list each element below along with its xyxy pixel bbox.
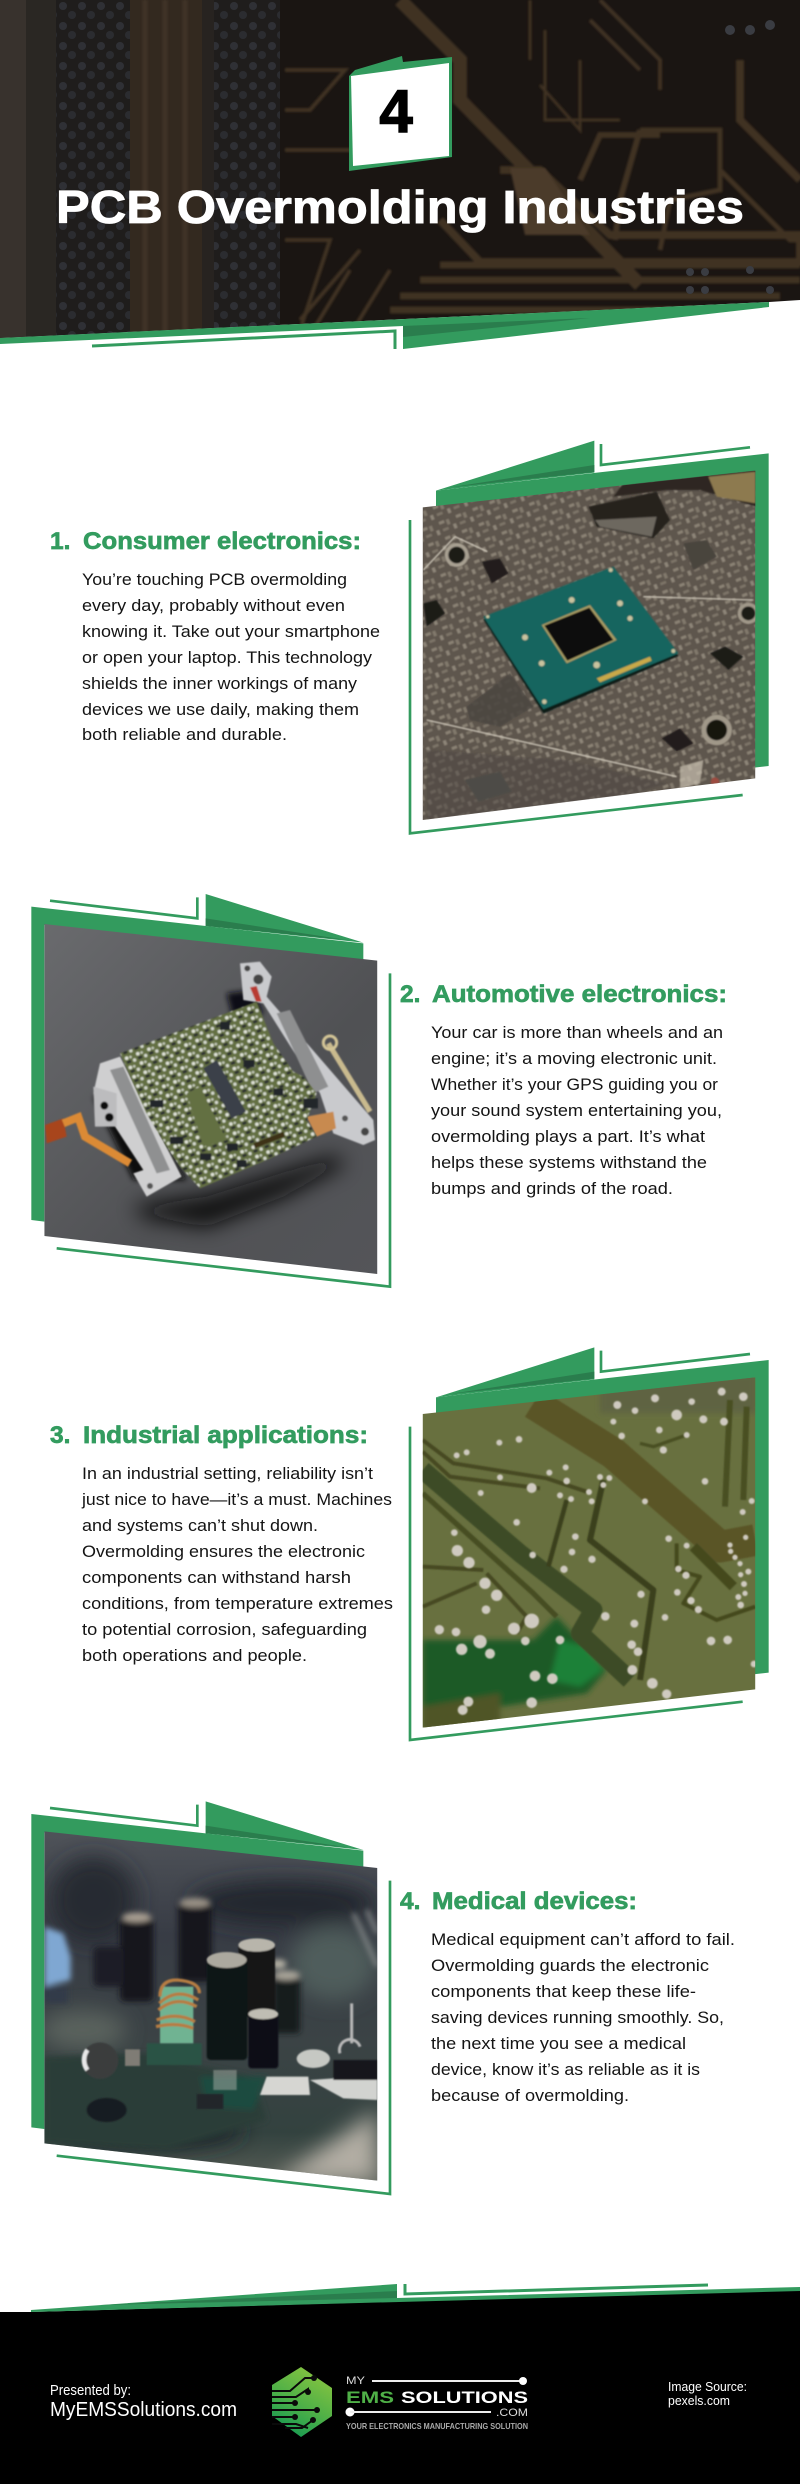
- section 4 body: saving devices running smoothly. So,: [431, 2008, 724, 2027]
- section 4 heading: Medical devices:: [432, 1888, 637, 1915]
- frame: [410, 441, 769, 833]
- section 2 body: engine; it’s a moving electronic unit.: [431, 1049, 717, 1068]
- bottom green ribbon of header: [0, 302, 769, 349]
- section 4 body: the next time you see a medical: [431, 2034, 686, 2053]
- section 1: consumer electronics text: [50, 528, 380, 744]
- footer background: [0, 2290, 800, 2484]
- logo wordmark: MY: [346, 2375, 366, 2387]
- section 3 body: just nice to have—it’s a must. Machines: [81, 1490, 392, 1509]
- section 1 body: [82, 570, 380, 744]
- board foreground: [44, 2053, 267, 2150]
- header panel: [0, 0, 800, 349]
- section 4 body: Overmolding guards the electronic: [431, 1956, 710, 1975]
- section 4 image with green frame: [31, 1801, 390, 2194]
- section 4 body: components that keep these life-: [431, 1982, 696, 2001]
- logo wordmark: SOLUTIONS: [401, 2389, 528, 2407]
- section 2 body: helps these systems withstand the: [431, 1153, 707, 1172]
- footer green ribbon: [31, 2284, 800, 2312]
- section 3 body: conditions, from temperature extremes: [82, 1594, 393, 1613]
- section 1 body: or open your laptop. This technology: [82, 648, 373, 667]
- section 3 heading: Industrial applications:: [83, 1422, 368, 1449]
- section 3 body: [81, 1464, 393, 1665]
- section 4 body: Medical equipment can’t afford to fail.: [431, 1930, 735, 1949]
- section 2 heading: 2.: [400, 981, 420, 1008]
- section 1 body: both reliable and durable.: [82, 725, 287, 744]
- main title: PCB Overmolding Industries: [56, 181, 744, 233]
- badge number 4: 4: [379, 78, 413, 145]
- PCB board: [120, 1002, 318, 1188]
- photo: PCB module on metal frame: [40, 920, 380, 1277]
- image source: [668, 2379, 747, 2408]
- section 4: medical devices text: [400, 1888, 735, 2105]
- frame: [31, 1801, 390, 2194]
- logo wordmark: EMS: [346, 2389, 394, 2407]
- capacitors: [156, 1938, 278, 2068]
- blurred background capacitors: [44, 1898, 377, 2033]
- section 2 body: [431, 1023, 723, 1198]
- presented by: MyEMSSolutions.com: [50, 2399, 237, 2421]
- section 1 image with green frame: [410, 441, 769, 833]
- section 2 heading: Automotive electronics:: [432, 981, 727, 1008]
- section 2 body: your sound system entertaining you,: [431, 1101, 722, 1120]
- image source: Image Source:: [668, 2379, 747, 2394]
- section 2 body: Your car is more than wheels and an: [431, 1023, 723, 1042]
- section 2 body: Whether it’s your GPS guiding you or: [431, 1075, 718, 1094]
- frame: [410, 1347, 769, 1740]
- photo: capacitors and coil on circuit board: [40, 1827, 380, 2187]
- section 2 image with green frame: [31, 894, 390, 1287]
- section 2 body: bumps and grinds of the road.: [431, 1179, 673, 1198]
- section 4 heading: 4.: [400, 1888, 420, 1915]
- section 2: automotive electronics text: [400, 981, 727, 1198]
- section 3 body: and systems can’t shut down.: [82, 1516, 318, 1535]
- section 3 body: In an industrial setting, reliability isn’t: [82, 1464, 373, 1483]
- footer panel: [0, 2284, 800, 2484]
- section 3 body: both operations and people.: [82, 1646, 307, 1665]
- section 3: industrial applications text: [50, 1422, 393, 1665]
- section 2 body: overmolding plays a part. It’s what: [431, 1127, 705, 1146]
- number badge: [349, 56, 452, 171]
- section 1 body: knowing it. Take out your smartphone: [82, 622, 380, 641]
- section 4 body: because of overmolding.: [431, 2086, 629, 2105]
- photo: chip on circuit board: [420, 467, 759, 823]
- frame: [31, 894, 390, 1287]
- presented by: Presented by:: [50, 2383, 131, 2399]
- header background photo: circuit board: [0, 0, 800, 345]
- section 3 body: Overmolding ensures the electronic: [82, 1542, 366, 1561]
- section 1 heading: Consumer electronics:: [83, 528, 361, 555]
- logo wordmark: .COM: [496, 2407, 528, 2419]
- section 1 body: every day, probably without even: [82, 596, 345, 615]
- logo wordmark: [346, 2375, 528, 2431]
- section 1 body: devices we use daily, making them: [82, 700, 359, 719]
- section 1 heading: 1.: [50, 528, 70, 555]
- presented by: [50, 2383, 237, 2421]
- photo: green circuit board traces: [420, 1373, 757, 1730]
- section 1 body: shields the inner workings of many: [82, 674, 358, 693]
- section 3 body: to potential corrosion, safeguarding: [82, 1620, 367, 1639]
- section 1 body: You’re touching PCB overmolding: [82, 570, 347, 589]
- section 3 image with green frame: [410, 1347, 769, 1740]
- section 3 body: components can withstand harsh: [82, 1568, 351, 1587]
- section 4 body: [431, 1930, 735, 2105]
- section 3 heading: 3.: [50, 1422, 70, 1449]
- section 4 body: device, know it’s as reliable as it is: [431, 2060, 700, 2079]
- image source: pexels.com: [668, 2393, 730, 2408]
- company logo: [272, 2367, 528, 2437]
- chip: [483, 567, 678, 714]
- logo wordmark: YOUR ELECTRONICS MANUFACTURING SOLUTION: [346, 2421, 528, 2431]
- logo hexagon icon: [272, 2367, 332, 2437]
